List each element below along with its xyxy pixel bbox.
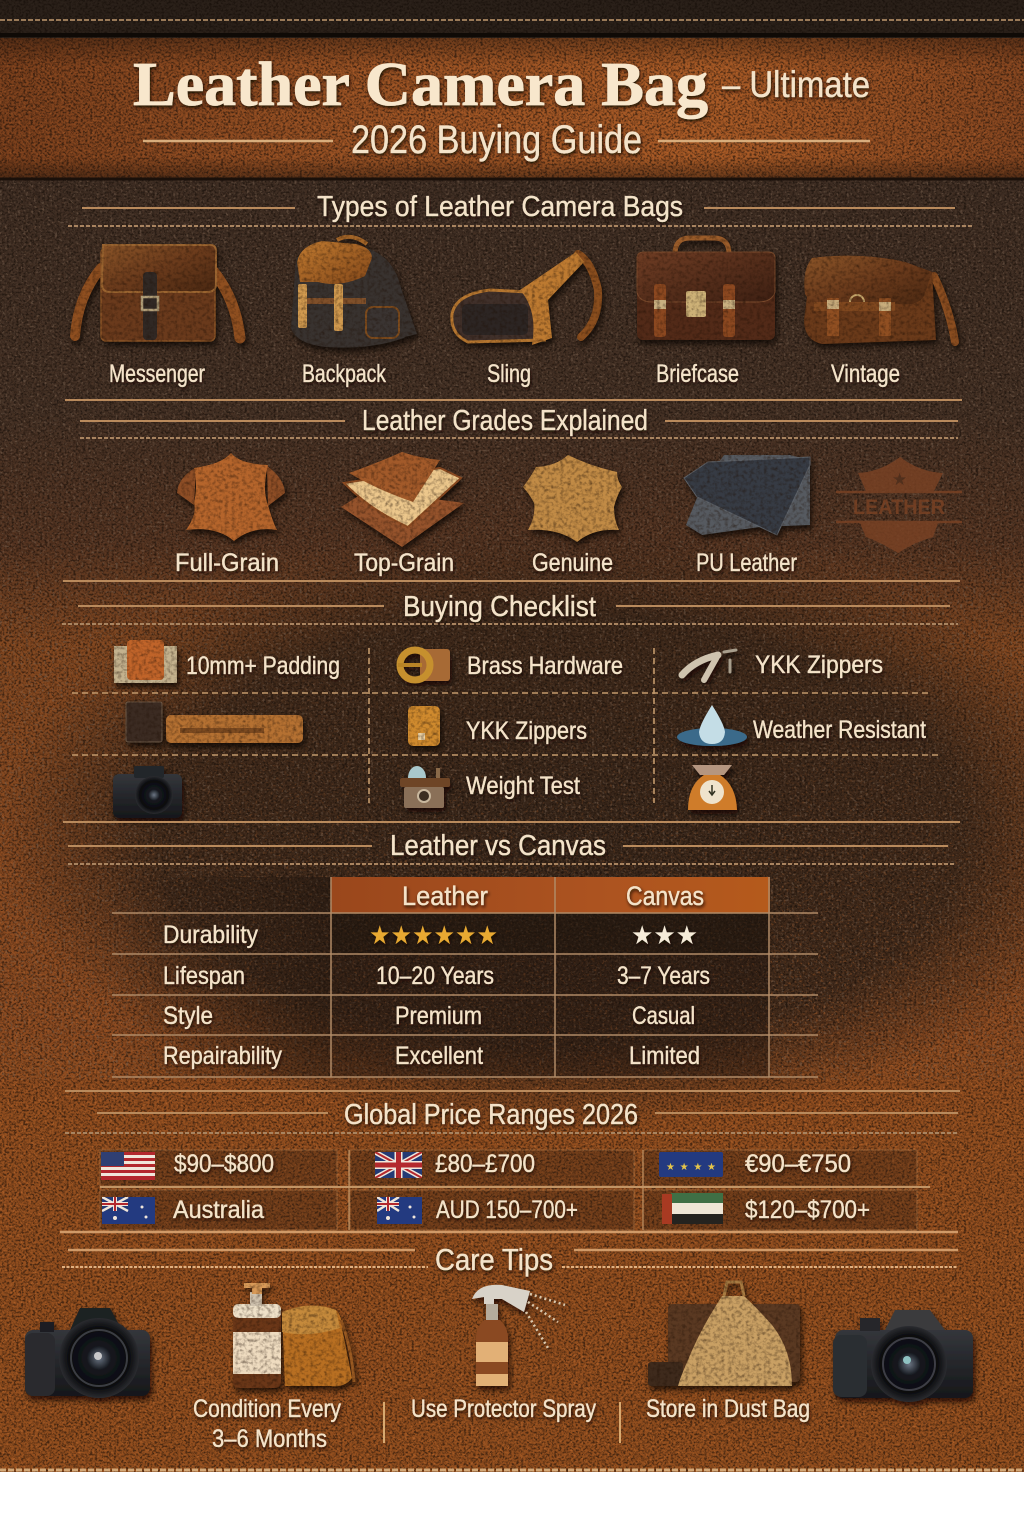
panel: leather grades (80, 405, 962, 577)
care tip labels: Use Protector Spray (411, 1395, 596, 1423)
price labels: Australia (173, 1196, 264, 1224)
care tip labels (193, 1395, 810, 1453)
icon: brass buckle (398, 649, 450, 681)
panel: buying checklist (62, 591, 958, 818)
price labels: £80–£700 (435, 1150, 535, 1178)
heading: care tips: Care Tips (435, 1242, 553, 1277)
grade labels: Genuine (532, 549, 613, 577)
panel: care tips (25, 1242, 973, 1453)
top stitched band (0, 0, 1024, 38)
panel: types of leather camera bags (68, 191, 972, 388)
care tip labels: Store in Dust Bag (646, 1395, 810, 1423)
heading: buying checklist: Buying Checklist (403, 591, 596, 623)
price labels: AUD 150–700+ (436, 1196, 578, 1224)
icon: conditioner bottle and pouch (233, 1283, 354, 1388)
comparison table: Excellent (395, 1042, 483, 1070)
header banner (0, 38, 1024, 179)
checklist labels (186, 651, 926, 800)
icon: protector spray (472, 1285, 565, 1386)
icon: backpack (291, 237, 417, 348)
bottom stitching (0, 1470, 1024, 1536)
icon: genuine hide (523, 455, 622, 542)
price grid panels (100, 1150, 930, 1230)
icon: camera left (25, 1308, 150, 1398)
price labels: $120–$700+ (745, 1196, 870, 1224)
comparison table: ★★★★★★ (369, 921, 498, 951)
panel: global price ranges (65, 1099, 958, 1230)
bag labels: Backpack (302, 360, 386, 388)
care tip labels: 3–6 Months (212, 1425, 327, 1453)
flag: United States (101, 1152, 155, 1180)
comparison table: Style (163, 1002, 213, 1030)
icon: briefcase (637, 238, 775, 340)
subtitle: 2026 Buying Guide (351, 118, 642, 162)
icon: water drop (677, 705, 747, 746)
checklist labels: YKK Zippers (755, 651, 883, 679)
comparison table: Durability (163, 921, 258, 949)
icon: PU leather (684, 455, 810, 535)
flag: UAE (662, 1193, 723, 1224)
bag labels: Briefcase (656, 360, 739, 388)
flag: Australia second (377, 1197, 422, 1224)
icon: zipper pull (682, 650, 736, 680)
icon: camera small (113, 766, 182, 818)
comparison table: 3–7 Years (617, 962, 710, 990)
icon: messenger bag (75, 245, 240, 341)
checklist labels: Weight Test (466, 772, 580, 800)
checklist labels: Weather Resistant (753, 716, 926, 744)
comparison table: ★★★ (631, 921, 698, 951)
icon: tan zipper pouch (408, 706, 440, 746)
comparison table: 10–20 Years (376, 962, 494, 990)
price labels (173, 1150, 870, 1224)
bag labels (109, 360, 900, 388)
grade labels: PU Leather (696, 549, 797, 577)
icon: full-grain hide (177, 453, 285, 541)
comparison table: Repairability (163, 1042, 282, 1070)
bag labels: Vintage (831, 360, 900, 388)
heading: leather grades: Leather Grades Explained (362, 405, 648, 437)
flag: Australia (102, 1197, 155, 1224)
icon: dust bag (648, 1282, 800, 1386)
comparison table: Lifespan (163, 962, 245, 990)
grade labels (175, 549, 797, 577)
price labels: $90–$800 (174, 1150, 274, 1178)
bag labels: Messenger (109, 360, 205, 388)
icon: faded leather badge: LEATHER (853, 496, 945, 519)
heading: price ranges: Global Price Ranges 2026 (344, 1099, 638, 1131)
icon: top-grain stack (341, 452, 464, 547)
flag: European Union (659, 1152, 723, 1177)
icon: leather strap (126, 702, 303, 743)
panel: leather vs canvas (68, 830, 955, 1077)
bag labels: Sling (487, 360, 531, 388)
checklist labels: 10mm+ Padding (186, 652, 340, 680)
checklist labels: Brass Hardware (467, 652, 623, 680)
title: – Ultimate (722, 64, 870, 105)
care tip labels: Condition Every (193, 1395, 341, 1423)
comparison table: Leather (402, 881, 488, 911)
icon: weight scale (400, 766, 450, 808)
grade labels: Top-Grain (354, 549, 454, 577)
grade labels: Full-Grain (175, 549, 279, 577)
flag: European Union: ★ ★ ★ ★ (666, 1162, 716, 1173)
comparison table: Premium (395, 1002, 482, 1030)
checklist labels: YKK Zippers (466, 717, 587, 745)
icon: sling bag (452, 252, 598, 345)
icon: vintage bag (804, 256, 955, 344)
flag: United Kingdom (375, 1152, 422, 1178)
icon: camera right (833, 1310, 973, 1402)
price labels: €90–€750 (745, 1150, 851, 1178)
comparison table (112, 877, 818, 1077)
icon: padding swatch (114, 640, 177, 683)
comparison table: Casual (632, 1002, 695, 1030)
icon: faded leather badge (836, 457, 962, 553)
icon: kitchen scale (688, 765, 737, 810)
icon: faded leather badge: ★ (892, 470, 907, 490)
heading: types: Types of Leather Camera Bags (317, 191, 683, 223)
comparison table: Limited (629, 1042, 700, 1070)
comparison table: Canvas (626, 881, 704, 911)
heading: leather vs canvas: Leather vs Canvas (390, 830, 606, 862)
title: Leather Camera Bag (133, 51, 708, 119)
